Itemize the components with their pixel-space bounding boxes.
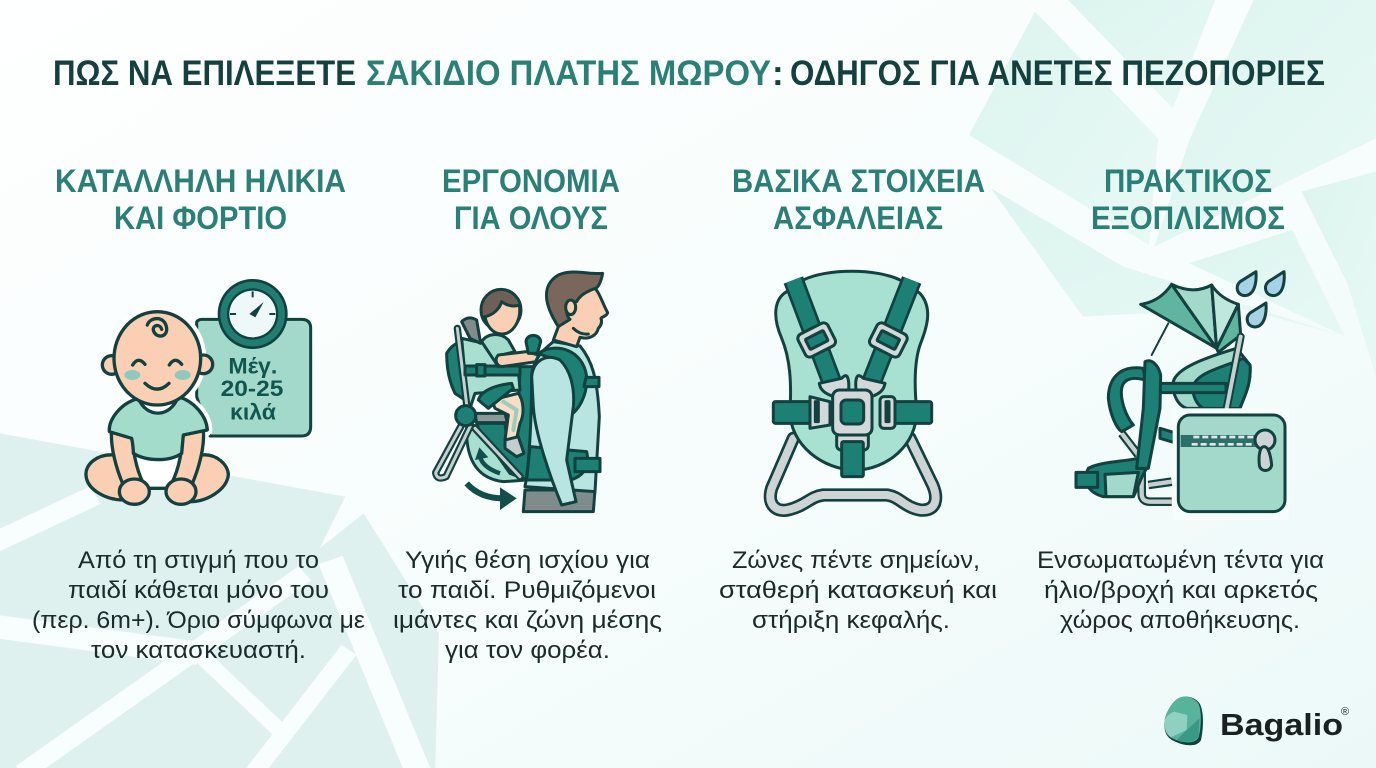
back panel: [776, 271, 928, 470]
weight label: κιλά: [230, 399, 277, 424]
arrow: hip rotation inner: [475, 447, 500, 473]
text: ergonomics: ιμάντες και ζώνη μέσης: [393, 607, 662, 634]
heading: age and load: [55, 163, 346, 236]
title: ΠΩΣ ΝΑ ΕΠΙΛΕΞΕΤΕ: [53, 54, 356, 93]
heading: equipment: ΕΞΟΠΛΙΣΜΟΣ: [1091, 200, 1285, 236]
heading: age and load: ΚΑΙ ΦΟΡΤΙΟ: [114, 200, 287, 236]
seat: [1173, 348, 1250, 408]
title: :: [772, 54, 784, 93]
icon: logo gem: [1164, 697, 1203, 745]
hip belt: [1086, 458, 1147, 497]
text: ergonomics: Υγιής θέση ισχίου για: [405, 547, 650, 574]
text: safety: Ζώνες πέντε σημείων,: [732, 547, 980, 574]
weight tag: [197, 319, 311, 436]
strap sliders: [796, 321, 909, 359]
carrier body: [447, 318, 535, 482]
registered mark: ®: [1341, 706, 1349, 718]
text: age and load: [32, 547, 365, 664]
baby: [86, 311, 228, 504]
text: ergonomics: για τον φορέα.: [445, 637, 610, 664]
text: safety: στήριξη κεφαλής.: [752, 607, 950, 634]
arrow: hip rotation outer: [467, 483, 517, 510]
shoulder strap: [1108, 368, 1145, 432]
weight label: [221, 353, 283, 424]
icon: scale dial: [218, 279, 288, 349]
text: age and load: (περ. 6m+). Όριο σύμφωνα με: [32, 607, 365, 634]
icon: storage pouch: [1173, 408, 1289, 520]
heading: equipment: ΠΡΑΚΤΙΚΟΣ: [1104, 163, 1272, 199]
text: ergonomics: [393, 547, 662, 664]
shoulder straps: [793, 280, 912, 382]
heading: ergonomics: [442, 163, 620, 236]
heading: safety: ΑΣΦΑΛΕΙΑΣ: [773, 200, 943, 236]
frame: [436, 328, 520, 478]
heading: age and load: ΚΑΤΑΛΛΗΛΗ ΗΛΙΚΙΑ: [55, 163, 346, 199]
text: ergonomics: το παιδί. Ρυθμιζόμενοι: [398, 577, 656, 604]
title: ΣΑΚΙΔΙΟ ΠΛΑΤΗΣ ΜΩΡΟΥ: [366, 54, 771, 93]
heading: equipment: [1091, 163, 1285, 236]
heading: safety: ΒΑΣΙΚΑ ΣΤΟΙΧΕΙΑ: [732, 163, 985, 199]
text: age and load: παιδί κάθεται μόνο του: [68, 577, 329, 604]
heading: safety: [732, 163, 985, 236]
weight label: 20-25: [221, 376, 283, 401]
text: equipment: [1037, 547, 1324, 634]
panel: equipment: [1037, 163, 1324, 634]
parent: [523, 272, 608, 512]
text: age and load: Από τη στιγμή που το: [78, 547, 319, 574]
panel: safety: [719, 163, 997, 634]
icon: rain drops: [1237, 272, 1284, 327]
wordmark: Bagalio: [1220, 707, 1343, 742]
icon: baby with weight tag: [86, 279, 311, 504]
child: [478, 289, 541, 457]
text: equipment: Ενσωματωμένη τέντα για: [1037, 547, 1324, 574]
heading: ergonomics: ΓΙΑ ΟΛΟΥΣ: [454, 200, 608, 236]
heading: ergonomics: ΕΡΓΟΝΟΜΙΑ: [442, 163, 620, 199]
text: safety: σταθερή κατασκευή και: [719, 577, 997, 604]
title: [53, 54, 1325, 93]
icon: parent carrying child in backpack: [436, 272, 608, 512]
buckle: [773, 376, 932, 477]
icon: five-point harness: [770, 271, 936, 510]
text: safety: [719, 547, 997, 634]
weight label: Μέγ.: [228, 353, 277, 378]
text: equipment: ήλιο/βροχή και αρκετός: [1044, 577, 1318, 604]
panel: age and load: [32, 163, 365, 664]
harness frame: [770, 438, 936, 510]
icon: carrier with canopy and storage pouch: [1076, 272, 1289, 520]
title: ΟΔΗΓΟΣ ΓΙΑ ΑΝΕΤΕΣ ΠΕΖΟΠΟΡΙΕΣ: [790, 54, 1325, 93]
lower frame: [1122, 433, 1172, 502]
panel: ergonomics: [393, 163, 662, 664]
logo: Bagalio: [1164, 697, 1349, 745]
icon: canopy: [1141, 284, 1241, 355]
text: age and load: τον κατασκευαστή.: [91, 637, 306, 664]
text: equipment: χώρος αποθήκευσης.: [1060, 607, 1300, 634]
